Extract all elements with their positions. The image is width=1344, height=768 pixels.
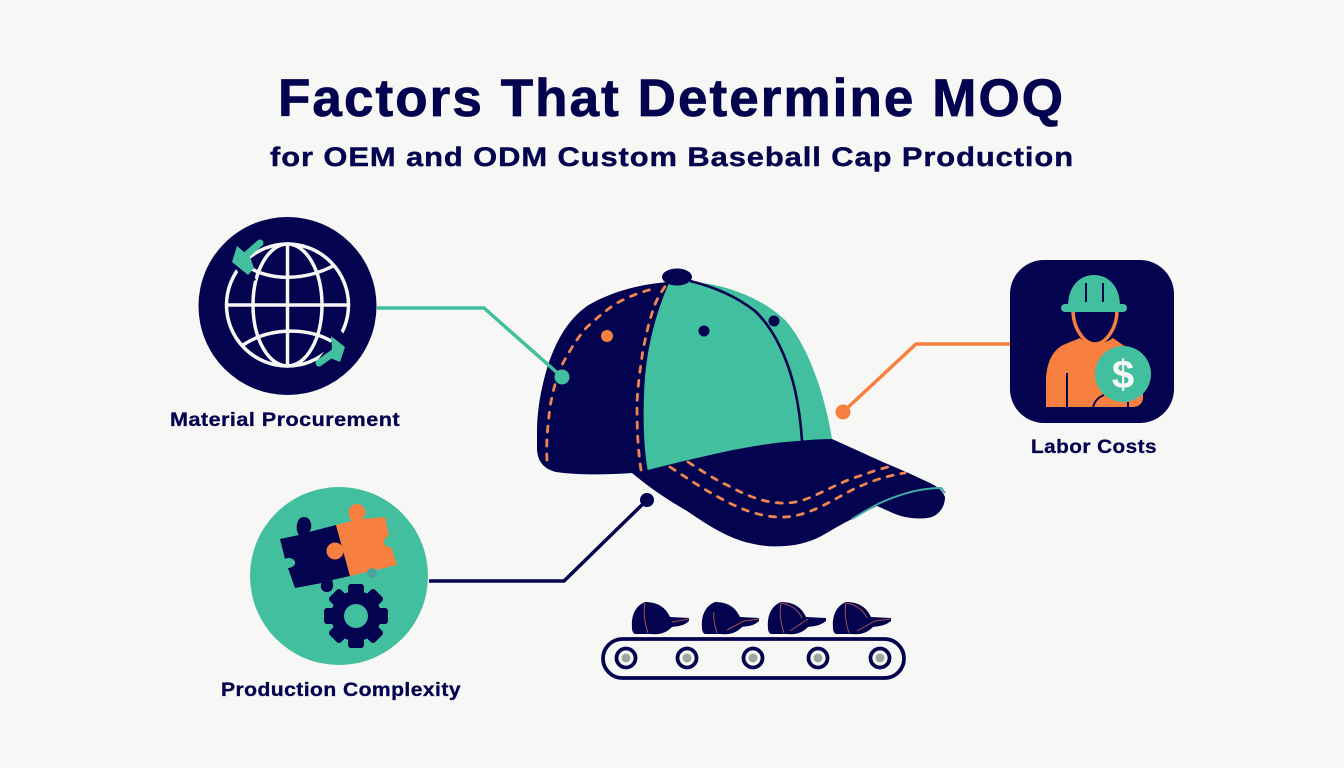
cap button xyxy=(662,268,692,286)
cap green front panel xyxy=(644,282,832,472)
dollar badge xyxy=(1095,346,1151,402)
connector: labor costs xyxy=(836,344,1011,420)
title: Factors That Determine MOQ xyxy=(278,69,1063,128)
mini caps xyxy=(632,602,891,634)
cap stitching xyxy=(547,283,905,517)
icon: production complexity puzzle and gear xyxy=(250,487,428,665)
subtitle: for OEM and ODM Custom Baseball Cap Production xyxy=(270,142,1074,172)
hard hat xyxy=(1061,275,1127,312)
dollar badge: $ xyxy=(1112,353,1134,397)
connector: material procurement xyxy=(377,308,570,384)
connector: production complexity xyxy=(429,493,654,581)
cap brim xyxy=(632,439,945,546)
icon: material procurement globe xyxy=(198,217,376,395)
label: labor costs: Labor Costs xyxy=(1031,437,1157,458)
cap navy side panel xyxy=(537,282,669,478)
worker head xyxy=(1073,310,1117,344)
icon: labor costs worker xyxy=(1010,260,1174,423)
conveyor belt xyxy=(603,639,904,678)
cap seam xyxy=(690,281,802,441)
orange puzzle piece xyxy=(326,504,397,576)
label: material procurement: Material Procurement xyxy=(170,410,400,431)
conveyor rollers xyxy=(616,648,890,668)
arrows on globe xyxy=(226,240,354,372)
worker body xyxy=(1046,338,1143,407)
gear xyxy=(324,584,388,648)
label: production complexity: Production Complexity xyxy=(221,680,461,701)
panel: baseball cap xyxy=(537,268,945,546)
conveyor with caps xyxy=(603,602,904,678)
cap eyelets xyxy=(601,316,780,342)
navy puzzle piece xyxy=(280,517,350,592)
cap brim teal lip xyxy=(852,488,945,519)
